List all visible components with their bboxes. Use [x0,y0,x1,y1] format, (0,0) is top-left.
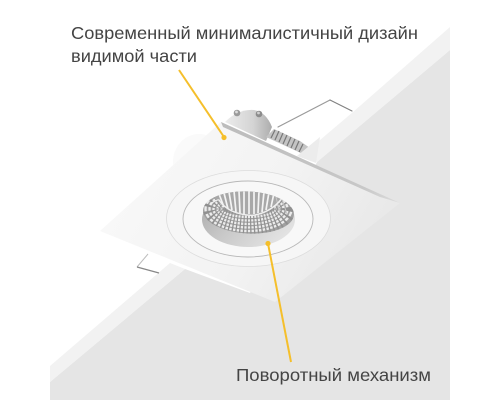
driver dome with screws [225,110,272,141]
pointer line: design [179,70,227,140]
pointer line: rotating mechanism [265,241,291,362]
spring clip: bottom [137,254,159,273]
spring clip: top [278,100,352,127]
ceiling panel [50,27,450,400]
outer ring of bezel [166,170,330,266]
label: rotating mechanism: Поворотный механизм [236,365,431,385]
heading: minimalist design label: Современный минималистичный дизайн [71,23,418,43]
inner rotating ring [183,181,313,257]
heading: minimalist design label [71,23,418,66]
rear housing bulge [173,134,225,190]
recessed cone [202,192,295,247]
heading: minimalist design label: видимой части [71,46,197,66]
infographic: recessed spotlight [50,26,450,400]
square trim plate [100,122,400,302]
rear heat sink [266,129,320,163]
reflector with faceted cells [203,191,294,234]
